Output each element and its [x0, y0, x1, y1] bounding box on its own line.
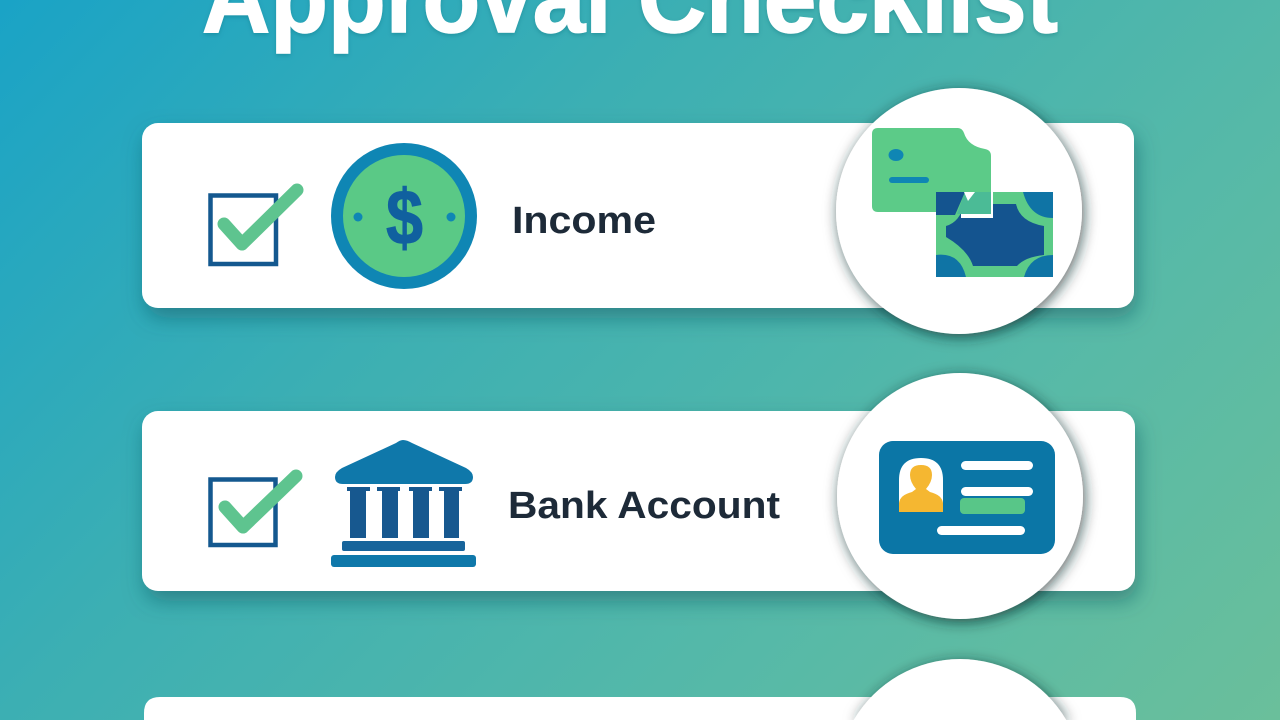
income label: Income: [512, 200, 656, 242]
icon: dollar coin: $: [386, 173, 423, 261]
icon: bank building: [331, 440, 476, 567]
panel: third row (cropped): [144, 659, 1136, 720]
bank account card background: [142, 411, 1135, 591]
circle badge: bank account: [837, 373, 1083, 619]
icon: ID card: [879, 441, 1055, 554]
icon: banknotes: [872, 128, 1053, 277]
third card background: [144, 697, 1136, 720]
icon: income checkbox: [210, 190, 297, 264]
circle badge: third row: [854, 659, 1066, 720]
circle badge: income: [836, 88, 1082, 334]
panel: income row: [142, 88, 1134, 334]
bank account label: Bank Account: [508, 485, 780, 527]
panel: bank account row: [142, 373, 1135, 619]
icon: dollar coin: [331, 143, 477, 289]
income card background: [142, 123, 1134, 308]
icon: bank account checkbox: [210, 476, 296, 545]
